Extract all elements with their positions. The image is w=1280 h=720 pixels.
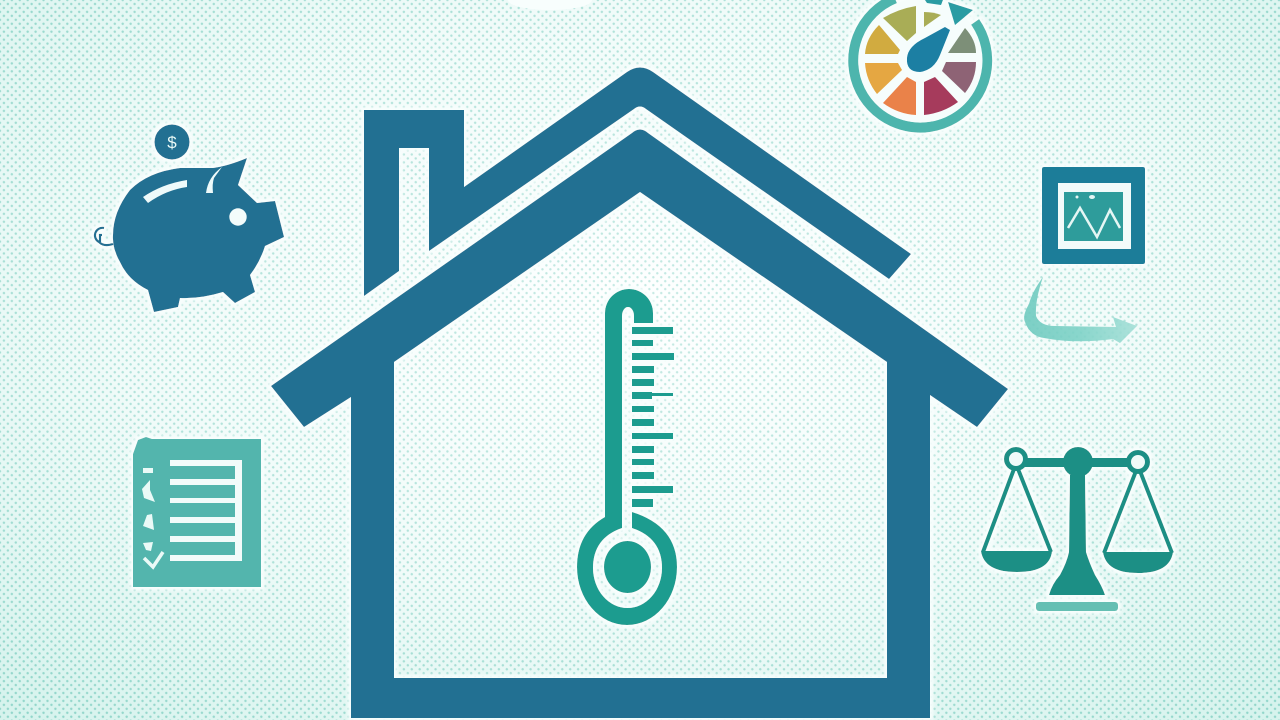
icon: thermometer [577,289,677,625]
coin: $ [167,133,177,152]
upper roof and chimney [364,68,911,296]
coin [154,124,190,160]
lower roof and walls [271,130,1008,718]
arrow: curved teal [1024,277,1137,343]
right pan [1103,552,1173,573]
highlights [143,180,187,203]
ring [853,0,987,128]
tail [95,228,113,245]
icon: piggy bank with coin [95,124,284,312]
icon: gauge colour wheel [853,0,987,128]
beam [1020,458,1138,467]
segments [883,6,916,41]
house outline with chimney [271,68,1008,718]
left pan [981,551,1052,572]
needle [907,27,950,72]
icon: checklist document [133,437,261,587]
pig body [113,158,284,312]
arrow tip [948,2,973,25]
icon: framed chart [1042,167,1145,264]
post and base [1049,475,1105,595]
icon: balance scale [981,447,1173,611]
